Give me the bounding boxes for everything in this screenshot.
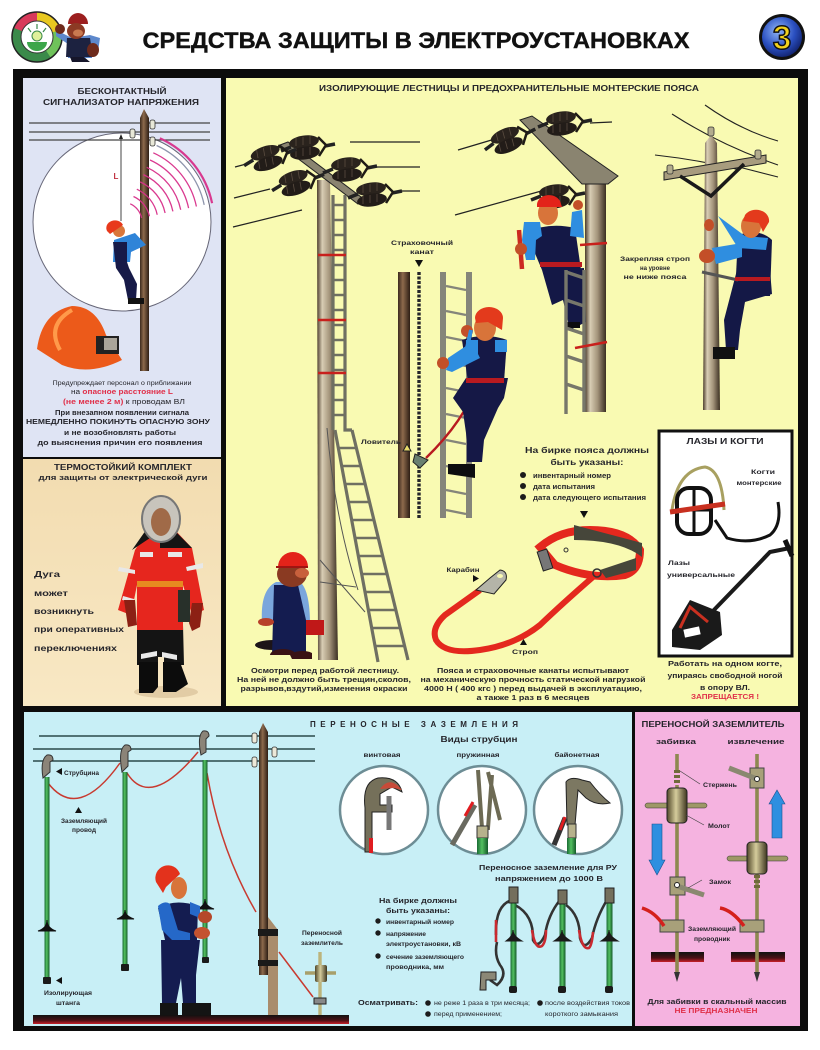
icon: climbing claws <box>670 467 779 541</box>
text: detector description <box>26 379 211 447</box>
text: earthing tag requirements: напряжение <box>386 932 427 938</box>
label: fastening the strap <box>620 256 690 281</box>
text: belt testing: на механическую прочность статической нагрузкой <box>420 676 646 684</box>
text: detector description: до выяснения причин его появления <box>38 440 202 447</box>
climbing worker <box>106 220 146 304</box>
label: portable grounder <box>301 930 343 947</box>
text: not for rock <box>648 998 787 1015</box>
text: belt tag requirements: быть указаны: <box>550 458 624 467</box>
text: arc warning: может <box>34 589 68 598</box>
text: belt tag requirements: инвентарный номер <box>533 472 611 480</box>
signal arcs <box>130 138 212 218</box>
text: earthing tag requirements: проводника, мм <box>386 965 445 971</box>
text: inspection schedule: Осматривать: <box>358 1000 418 1007</box>
text: earthing tag requirements: инвентарный номер <box>386 919 454 926</box>
label: clamp <box>56 768 99 777</box>
label: safety rope: Страховочный <box>391 239 453 247</box>
ground bars <box>651 952 785 962</box>
text: not for rock: НЕ ПРЕДНАЗНАЧЕН <box>674 1008 758 1015</box>
label: catcher: Ловитель <box>361 439 401 446</box>
label: fastening the strap: не ниже пояса <box>624 274 687 281</box>
label: portable grounder: заземлитель <box>301 941 343 947</box>
text: earthing tag requirements: сечение заземляющего <box>386 955 464 961</box>
icon: universal irons <box>672 540 792 650</box>
header logo <box>12 12 62 62</box>
insulators <box>130 120 155 146</box>
label: irons: Лазы <box>668 560 691 567</box>
text: irons warning: Работать на одном когте, <box>668 660 782 668</box>
detection circle <box>33 133 211 311</box>
heading: portable grounder: ПЕРЕНОСНОЙ ЗАЗЕМЛИТЕЛЬ <box>642 720 785 729</box>
heading: heat-resistant kit <box>38 463 208 482</box>
earthing rods with clamps <box>38 731 313 997</box>
heading: portable earthing: ПЕРЕНОСНЫЕ ЗАЗЕМЛЕНИЯ <box>310 720 518 729</box>
text: belt testing: 4000 Н ( 400 кгс ) перед выдачей в эксплуатацию, <box>424 685 642 693</box>
heading: detector <box>43 87 199 107</box>
text: irons warning <box>668 660 782 701</box>
text: ladder inspection: разрывов,вздутий,изменения окраски <box>240 685 408 693</box>
text: arc warning: переключениях <box>34 644 118 653</box>
person in arc suit <box>118 496 204 698</box>
helmet with detector <box>37 306 122 369</box>
label: fastening the strap: на уровне <box>640 265 670 272</box>
label: claws <box>736 469 782 487</box>
text: irons warning: упираясь свободной ногой <box>668 672 782 680</box>
text: detector description: Предупреждает персонал о приближании <box>52 379 192 387</box>
label: clamp: Струбцина <box>64 769 99 777</box>
page number badge <box>759 14 805 60</box>
text: not for rock: Для забивки в скальный массив <box>648 998 787 1006</box>
clamp type labels <box>364 751 600 759</box>
text: ladder inspection: Осмотри перед работой лестницу. <box>251 667 399 675</box>
panel: heat-resistant kit <box>23 459 221 706</box>
heading: heat-resistant kit: ТЕРМОСТОЙКИЙ КОМПЛЕКТ <box>54 463 192 472</box>
label: irons: универсальные <box>667 572 736 579</box>
label: safety rope <box>391 239 453 267</box>
labels: grounder parts: проводник <box>694 937 730 943</box>
label: insulating rod: штанга <box>56 1001 81 1007</box>
heading: earthing up to 1000 V: напряжением до 1000 В <box>495 874 604 883</box>
portable grounder device <box>305 952 336 1015</box>
carabiner <box>476 570 506 594</box>
labels: grounder parts: Замок <box>709 880 731 886</box>
label: insulating rod: Изолирующая <box>44 991 93 997</box>
text: ladder inspection <box>237 667 411 693</box>
label: earthing wire: провод <box>72 828 96 834</box>
text: belt testing: Пояса и страховочные канаты испытывают <box>437 668 630 675</box>
worker raising rod <box>155 865 212 1015</box>
label: insulating rod <box>44 977 93 1007</box>
text: detector description: При внезапном появлении сигнала <box>55 410 189 417</box>
label: strap <box>512 639 538 656</box>
text: belt testing: а также 1 раз в 6 месяцев <box>476 695 590 702</box>
text: irons warning: ЗАПРЕЩАЕТСЯ ! <box>691 694 759 701</box>
panel: portable grounder <box>635 712 800 1026</box>
heading: heat-resistant kit: для защиты от электрической дуги <box>38 474 208 482</box>
heading: ladders and belts: ИЗОЛИРУЮЩИЕ ЛЕСТНИЦЫ И ПРЕДОХРАНИТЕЛЬНЫЕ МОНТЕРСКИЕ ПОЯСА <box>319 84 699 93</box>
text: inspection schedule: после воздействия токов <box>545 1000 630 1007</box>
text: earthing tag requirements <box>375 897 464 971</box>
labels: grounder parts: Заземляющий <box>688 926 736 933</box>
heading: earthing up to 1000 V: Переносное заземление для РУ <box>479 863 617 872</box>
text: arc warning: Дуга <box>34 570 61 579</box>
panel: portable earthing <box>24 712 632 1026</box>
ladder on the pole <box>333 195 408 662</box>
page number badge: 3 <box>773 19 791 56</box>
header mascot <box>55 13 100 62</box>
worker on ladder <box>426 307 508 478</box>
text: inspection schedule: не реже 1 раза в три месяца; <box>434 1001 530 1007</box>
text: detector description: на опасное расстояние L <box>71 389 174 396</box>
clamp type labels: пружинная <box>456 752 500 759</box>
text: earthing tag requirements: электроустановки, кВ <box>386 942 462 948</box>
scene: pole climber with strap <box>655 105 778 410</box>
text: earthing tag requirements: быть указаны: <box>386 907 450 915</box>
text: detector description: НЕМЕДЛЕННО ПОКИНУТЬ ОПАСНУЮ ЗОНУ <box>26 419 211 426</box>
scene: leaning ladder pole <box>233 133 420 662</box>
text: belt testing <box>420 668 646 702</box>
text: arc warning: возникнуть <box>34 607 94 616</box>
extraction tool <box>720 754 788 982</box>
heading: earthing up to 1000 V <box>479 863 617 883</box>
label: catcher <box>361 439 428 468</box>
text: arc warning <box>34 570 125 653</box>
label: carabiner: Карабин <box>446 566 480 574</box>
text: irons warning: в опору ВЛ. <box>700 685 750 692</box>
label: claws: монтерские <box>736 480 782 487</box>
text: detector description: и не возобновлять работы <box>64 429 176 437</box>
heading: detector: СИГНАЛИЗАТОР НАПРЯЖЕНИЯ <box>43 98 199 107</box>
label: earthing wire <box>61 807 107 834</box>
clamp type labels: винтовая <box>364 752 401 759</box>
arrow: up <box>769 790 785 838</box>
heading: detector: БЕСКОНТАКТНЫЙ <box>78 87 167 96</box>
text: belt tag requirements: дата следующего испытания <box>533 495 646 502</box>
heading: irons and claws: ЛАЗЫ И КОГТИ <box>686 437 764 446</box>
text: arc warning: при оперативных <box>34 625 125 634</box>
arrow: down <box>649 824 665 875</box>
label: fastening the strap: Закрепляя строп <box>620 256 690 263</box>
text: inspection schedule: перед применением; <box>434 1012 502 1018</box>
worker with wrench <box>515 182 586 330</box>
label: strap: Строп <box>512 649 538 656</box>
heading: portable grounder: извлечение <box>728 737 784 746</box>
scene: pole with crossarm and worker on ladder <box>455 109 618 414</box>
ladder over worker <box>566 270 584 414</box>
driving tool <box>642 754 707 982</box>
text: inspection schedule: короткого замыкания <box>545 1012 618 1018</box>
text: belt tag requirements: На бирке пояса должны <box>525 446 649 455</box>
icon: screw clamp <box>340 766 428 854</box>
icon: spring clamp <box>438 766 526 854</box>
mascot inspecting ladder <box>255 552 324 659</box>
panel: insulated ladders and safety belts <box>226 78 798 706</box>
text: belt tag requirements: дата испытания <box>533 484 595 491</box>
text: ladder inspection: На ней не должно быть трещин,сколов, <box>237 676 411 684</box>
earthing set up to 1000 V <box>480 887 618 993</box>
labels: grounder parts: Стержень <box>703 783 737 789</box>
L distance line <box>114 134 123 221</box>
L distance line: L <box>114 172 119 181</box>
panel: contactless voltage detector <box>23 78 221 457</box>
text: earthing tag requirements: На бирке должны <box>379 897 457 905</box>
heading: portable grounder <box>642 720 785 746</box>
label: irons <box>667 560 736 579</box>
text: detector description: (не менее 2 м) к проводам ВЛ <box>63 399 186 406</box>
title: СРЕДСТВА ЗАЩИТЫ В ЭЛЕКТРОУСТАНОВКАХ <box>142 28 690 53</box>
clamp type labels: байонетная <box>554 751 600 759</box>
label: safety rope: канат <box>410 249 434 256</box>
overhead lines <box>33 736 315 761</box>
label: earthing wire: Заземляющий <box>61 818 107 825</box>
text: inspection schedule <box>358 1000 630 1018</box>
icon: bayonet clamp <box>534 766 622 854</box>
safety belt with strap <box>435 525 642 651</box>
scene: rope and catcher detail <box>398 272 469 518</box>
pole <box>140 109 149 371</box>
heading: portable grounder: забивка <box>656 737 697 746</box>
climbing worker <box>699 210 772 359</box>
label: claws: Когти <box>751 469 775 476</box>
text: belt tag requirements <box>520 446 649 518</box>
pole with concrete base <box>252 723 278 1015</box>
label: carabiner <box>446 566 480 582</box>
ground strip <box>33 1015 349 1024</box>
labels: grounder parts <box>680 771 737 943</box>
label: portable grounder: Переносной <box>302 930 342 937</box>
panel: climbing irons and claws <box>659 431 792 656</box>
heading: clamp types: Виды струбцин <box>440 735 518 744</box>
labels: grounder parts: Молот <box>708 824 730 830</box>
